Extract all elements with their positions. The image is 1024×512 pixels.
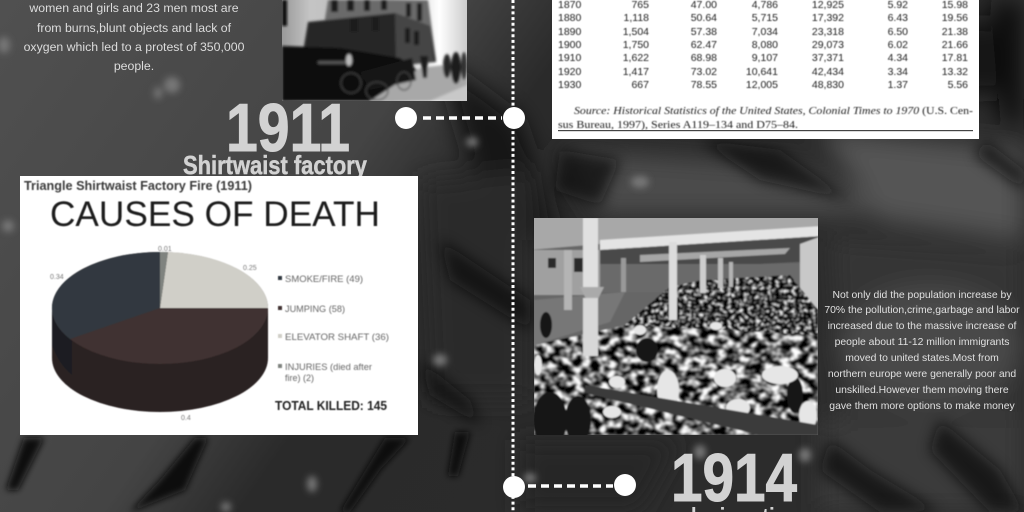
- table rows: 7,034: [752, 26, 778, 38]
- chart legend: ELEVATOR SHAFT (36): [285, 332, 389, 343]
- table rows: 3.34: [888, 66, 908, 78]
- chart legend: JUMPING (58): [285, 304, 345, 315]
- text block: immigration description: people about 11-12 million immigrants: [835, 337, 1009, 348]
- table rows: 23,318: [812, 26, 844, 38]
- table source note: sus Bureau, 1997), Series A119–134 and D75–84.: [558, 119, 798, 131]
- table rows: 12,005: [746, 79, 778, 91]
- table rows: 73.02: [691, 66, 717, 78]
- table rows: 1920: [558, 66, 582, 78]
- table rows: 667: [631, 79, 649, 91]
- table rows: 50.64: [691, 12, 717, 24]
- text block: fire description: people.: [114, 59, 154, 73]
- total killed: TOTAL KILLED: 145: [275, 399, 387, 413]
- table rows: 62.47: [691, 39, 717, 51]
- text block: fire description: women and girls and 23 men most are: [28, 1, 239, 15]
- text block: immigration description: northern europe were generally poor and: [828, 369, 1016, 380]
- chart legend: fire) (2): [285, 373, 314, 384]
- text block: fire description: from burns,blunt objects and lack of: [37, 21, 232, 35]
- table rows: 68.98: [691, 52, 717, 64]
- table rows: 1900: [558, 39, 582, 51]
- chart title: CAUSES OF DEATH: [50, 195, 380, 234]
- text block: immigration description: increased due to the massive increase of: [828, 321, 1017, 332]
- table rows: 17.81: [942, 52, 968, 64]
- table rows: 9,107: [752, 52, 778, 64]
- text block: immigration description: Not only did the population increase by: [832, 290, 1012, 301]
- text block: immigration description: gave them more options to make money: [829, 401, 1015, 412]
- chart legend: INJURIES (died after: [285, 362, 372, 373]
- table rows: 4.34: [888, 52, 908, 64]
- table rows: 1,622: [623, 52, 649, 64]
- photo: garment factory workers: [530, 214, 822, 448]
- table rows: 1,504: [623, 26, 649, 38]
- table rows: 5.56: [948, 79, 968, 91]
- table rows: 1,417: [623, 66, 649, 78]
- photo: factory fire street scene: [282, 0, 467, 101]
- table rows: 17,392: [812, 12, 844, 24]
- table rows: 48,830: [812, 79, 844, 91]
- table rows: 1.37: [888, 79, 908, 91]
- table rows: 5,715: [752, 12, 778, 24]
- 3D pie chart: 0.25: [243, 265, 257, 272]
- table rows: 57.38: [691, 26, 717, 38]
- year heading: 1911: 1911: [226, 90, 350, 166]
- table rows: 1910: [558, 52, 582, 64]
- table rows: 6.43: [888, 12, 908, 24]
- 3D pie chart: [50, 246, 268, 422]
- text block: immigration description: moved to united states.Most from: [845, 353, 999, 364]
- table rows: 1,118: [624, 12, 649, 24]
- table rows: 10,641: [746, 66, 778, 78]
- table rows: [558, 0, 968, 91]
- table rows: 1880: [558, 12, 582, 24]
- connector: 1911 node: [395, 107, 502, 129]
- table rows: 6.02: [888, 39, 908, 51]
- table rows: 6.50: [888, 26, 908, 38]
- text block: immigration description: [824, 290, 1020, 412]
- table rows: 42,434: [812, 66, 844, 78]
- table rows: 29,073: [812, 39, 844, 51]
- text block: immigration description: 70% the pollution,crime,garbage and labor: [824, 305, 1020, 316]
- table rows: 21.66: [942, 39, 968, 51]
- table rows: 13.32: [942, 66, 968, 78]
- table source note: Source: Historical Statistics of the United States, Colonial Times to 1970 (U.S. Cen-: [574, 105, 973, 117]
- table rows: 8,080: [752, 39, 778, 51]
- connector: 1914 node: [528, 474, 636, 496]
- chart legend: SMOKE/FIRE (49): [285, 274, 363, 285]
- chart legend: [278, 274, 389, 384]
- 3D pie chart: 0.4: [181, 415, 191, 422]
- table rows: 1930: [558, 79, 582, 91]
- table rows: 1890: [558, 26, 582, 38]
- table source note: [558, 105, 973, 131]
- timeline spine: [503, 0, 525, 512]
- table rows: 78.55: [691, 79, 717, 91]
- text block: fire description: oxygen which led to a protest of 350,000: [24, 40, 245, 54]
- 3D pie chart: 0.34: [50, 274, 64, 281]
- text block: fire description: [24, 1, 245, 73]
- text block: immigration description: unskilled.However them moving there: [835, 385, 1009, 396]
- 3D pie chart: 0.01: [158, 246, 172, 253]
- table rows: 37,371: [812, 52, 844, 64]
- table rows: 21.38: [942, 26, 968, 38]
- table rows: 1,750: [623, 39, 649, 51]
- chart panel: causes of death: [20, 176, 418, 435]
- chart super-title: Triangle Shirtwaist Factory Fire (1911): [24, 179, 252, 193]
- table panel: historical statistics: [552, 0, 979, 139]
- subheading: Shirtwaist factory: Shirtwaist factory: [183, 150, 367, 180]
- table rows: 19.56: [942, 12, 968, 24]
